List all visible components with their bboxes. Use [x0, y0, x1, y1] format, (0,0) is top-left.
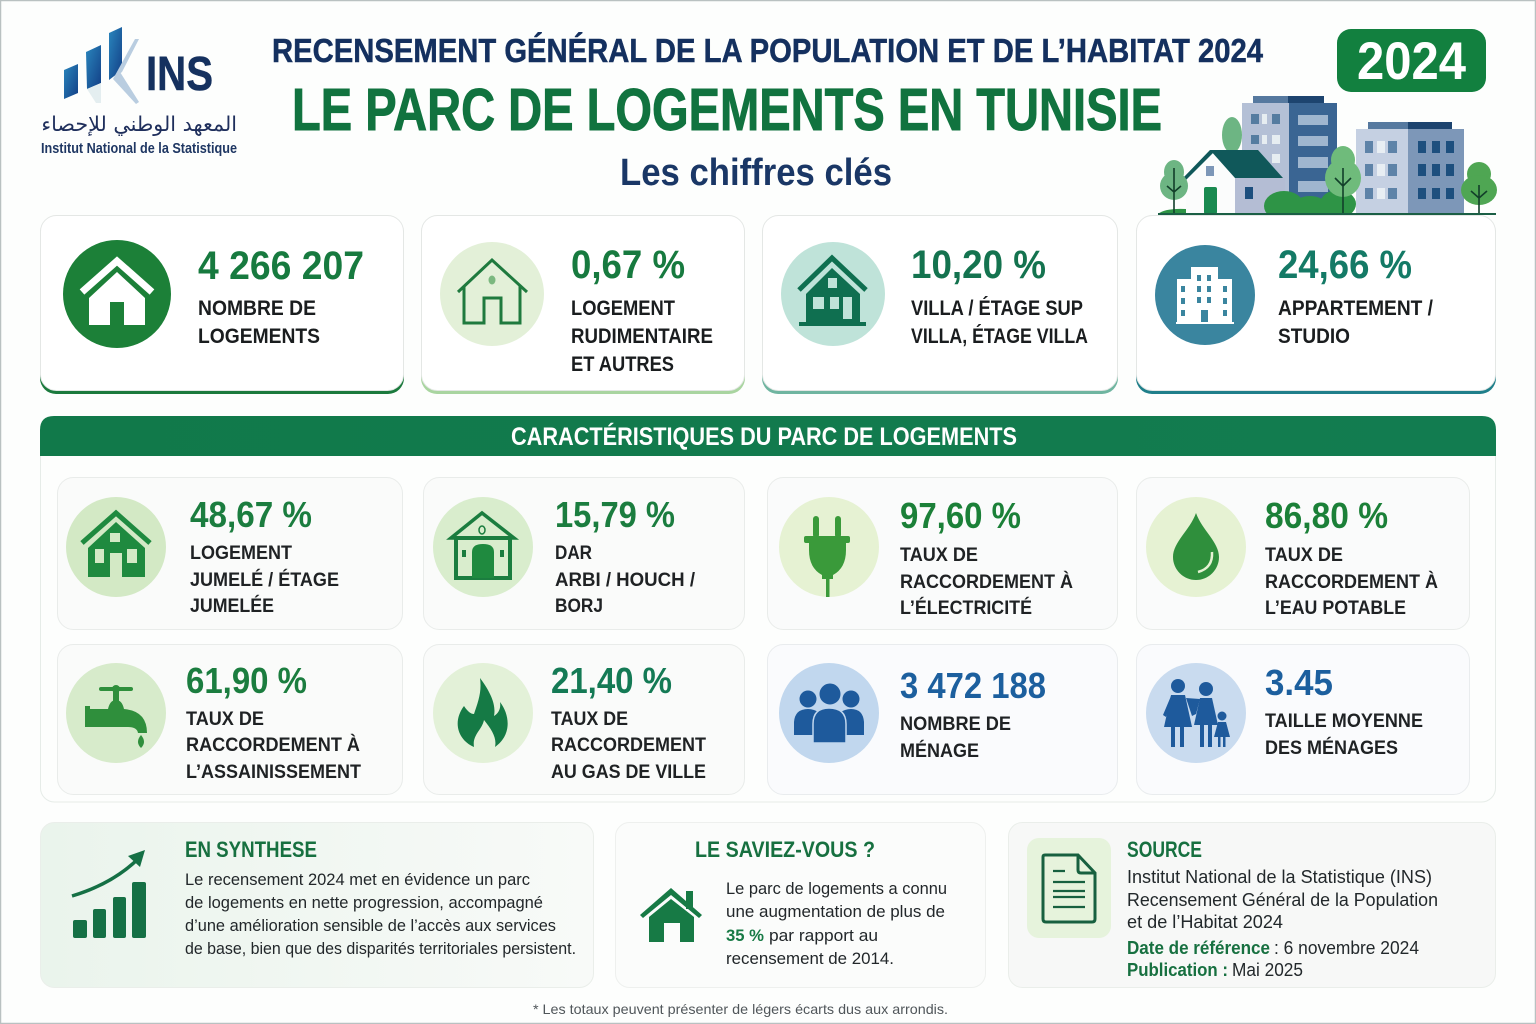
- icon: apartment building: [1155, 245, 1255, 345]
- icon: group of people: [779, 663, 879, 763]
- label: TAUX DE: [1265, 544, 1343, 566]
- value: 24,66 %: [1278, 243, 1412, 287]
- panel: card nombre de logements: [40, 216, 404, 394]
- label: [555, 542, 696, 617]
- icon: logo bars: [64, 27, 139, 104]
- label: [900, 713, 1011, 762]
- value: 3 472 188: [900, 665, 1046, 706]
- card: taille moyenne: [1136, 644, 1470, 794]
- label: AU GAS DE VILLE: [551, 761, 706, 783]
- logo french name: Institut National de la Statistique: [41, 141, 237, 157]
- label: [911, 297, 1088, 348]
- panel: caractéristiques: [40, 416, 1496, 802]
- text block: Recensement Général de la Population: [1127, 890, 1438, 910]
- text block: et de l’Habitat 2024: [1127, 912, 1283, 932]
- label: RACCORDEMENT: [551, 734, 706, 756]
- label: BORJ: [555, 595, 603, 617]
- icon: growth chart: [72, 850, 146, 938]
- label: RACCORDEMENT À: [900, 570, 1073, 593]
- panel: source: [1008, 822, 1496, 988]
- card: assainissement: [58, 644, 402, 794]
- icon: water tap: [66, 663, 166, 763]
- text block: de base, bien que des disparités territoriales persistent.: [185, 939, 576, 958]
- label: [571, 297, 713, 376]
- label: RACCORDEMENT À: [186, 733, 360, 756]
- illustration: city buildings: [1158, 96, 1497, 221]
- label: TAILLE MOYENNE: [1265, 710, 1423, 732]
- panel: card appartement: [1136, 216, 1496, 394]
- value: 0,67 %: [571, 243, 685, 287]
- label: L’ASSAINISSEMENT: [186, 761, 361, 783]
- dates: : 6 novembre 2024: [1274, 938, 1419, 958]
- label: NOMBRE DE: [900, 713, 1011, 735]
- heading: SOURCE: [1127, 837, 1202, 862]
- label: [198, 297, 320, 348]
- label: [186, 708, 361, 783]
- dates: Date de référence: [1127, 938, 1270, 958]
- label: [190, 542, 339, 617]
- label: LOGEMENTS: [198, 325, 320, 348]
- label: MÉNAGE: [900, 739, 979, 762]
- label: L’EAU POTABLE: [1265, 597, 1406, 619]
- label: DAR: [555, 542, 592, 564]
- card: dar arbi: [424, 478, 744, 630]
- card: eau potable: [1136, 478, 1470, 630]
- text block: 35 %: [726, 926, 764, 945]
- value: 48,67 %: [190, 494, 312, 535]
- text block: Institut National de la Statistique (INS): [1127, 867, 1432, 887]
- label: LOGEMENT: [190, 542, 292, 564]
- subtitle: Les chiffres clés: [620, 152, 892, 194]
- panel: card villa: [762, 216, 1118, 394]
- label: VILLA, ÉTAGE VILLA: [911, 325, 1088, 348]
- dates: Mai 2025: [1232, 960, 1303, 980]
- icon: flame: [433, 663, 533, 763]
- label: NOMBRE DE: [198, 297, 316, 320]
- label: JUMELÉ / ÉTAGE: [190, 568, 339, 591]
- logo wordmark: INS: [146, 48, 213, 101]
- label: [1278, 297, 1433, 348]
- value: 3.45: [1265, 662, 1333, 703]
- section heading bar: CARACTÉRISTIQUES DU PARC DE LOGEMENTS: [511, 422, 1017, 451]
- icon: electric plug: [779, 497, 879, 597]
- value: 61,90 %: [186, 660, 307, 701]
- icon: house: [640, 888, 702, 942]
- icon: jumelé house: [66, 497, 166, 597]
- label: L’ÉLECTRICITÉ: [900, 596, 1032, 619]
- footnote: * Les totaux peuvent présenter de légers écarts dus aux arrondis.: [533, 1001, 948, 1017]
- icon: outlined house: [440, 242, 544, 346]
- text block: Le recensement 2024 met en évidence un parc: [185, 870, 530, 889]
- icon: water drop: [1146, 497, 1246, 597]
- label: DES MÉNAGES: [1265, 736, 1398, 759]
- label: ARBI / HOUCH /: [555, 569, 696, 591]
- label: [1265, 544, 1438, 619]
- text block: par rapport au: [769, 926, 878, 945]
- section heading bar: [40, 416, 1496, 456]
- heading: EN SYNTHESE: [185, 837, 317, 862]
- label: STUDIO: [1278, 325, 1350, 348]
- value: 15,79 %: [555, 494, 675, 535]
- label: TAUX DE: [551, 708, 628, 730]
- label: RACCORDEMENT À: [1265, 570, 1438, 593]
- card: logement jumelé: [58, 478, 402, 630]
- dates: Publication :: [1127, 960, 1228, 980]
- value: 97,60 %: [900, 495, 1021, 536]
- label: [1265, 710, 1423, 759]
- card: électricité: [768, 478, 1118, 630]
- label: VILLA / ÉTAGE SUP: [911, 297, 1083, 320]
- value: 10,20 %: [911, 243, 1046, 287]
- card: gaz de ville: [424, 644, 744, 794]
- icon: document: [1027, 838, 1111, 938]
- value: 4 266 207: [198, 244, 364, 288]
- dates: [1127, 938, 1419, 980]
- text block: recensement de 2014.: [726, 949, 894, 968]
- text block: une augmentation de plus de: [726, 902, 945, 921]
- logo: INS: [41, 27, 237, 157]
- label: TAUX DE: [186, 708, 264, 730]
- label: JUMELÉE: [190, 594, 274, 617]
- label: [900, 544, 1073, 619]
- text block: [185, 870, 576, 958]
- text block: d’une amélioration sensible de l’accès aux services: [185, 916, 556, 935]
- logo arabic name: المعهد الوطني للإحصاء: [41, 112, 237, 136]
- header: census title: RECENSEMENT GÉNÉRAL DE LA POPULATION ET DE L’HABITAT 2024: [272, 32, 1264, 69]
- icon: family: [1146, 663, 1246, 763]
- label: [551, 708, 706, 783]
- panel: card logement rudimentaire: [421, 216, 745, 394]
- value: 21,40 %: [551, 660, 672, 701]
- panel: en synthèse: [40, 822, 594, 988]
- card: nombre de ménage: [768, 644, 1118, 794]
- title: LE PARC DE LOGEMENTS EN TUNISIE: [292, 77, 1162, 143]
- label: RUDIMENTAIRE: [571, 325, 713, 348]
- panel: le saviez-vous: [616, 822, 986, 988]
- text block: [726, 879, 947, 968]
- icon: house white on green: [63, 240, 171, 348]
- icon: villa house: [781, 242, 885, 346]
- value: 86,80 %: [1265, 495, 1388, 536]
- label: ET AUTRES: [571, 353, 674, 376]
- label: APPARTEMENT /: [1278, 297, 1433, 320]
- text block: de logements en nette progression, accompagné: [185, 893, 543, 912]
- icon: dar house: [433, 497, 533, 597]
- label: LOGEMENT: [571, 297, 675, 320]
- heading: LE SAVIEZ-VOUS ?: [695, 837, 875, 862]
- text block: [1127, 867, 1438, 932]
- year badge: 2024: [1357, 32, 1466, 91]
- text block: Le parc de logements a connu: [726, 879, 947, 898]
- label: TAUX DE: [900, 544, 978, 566]
